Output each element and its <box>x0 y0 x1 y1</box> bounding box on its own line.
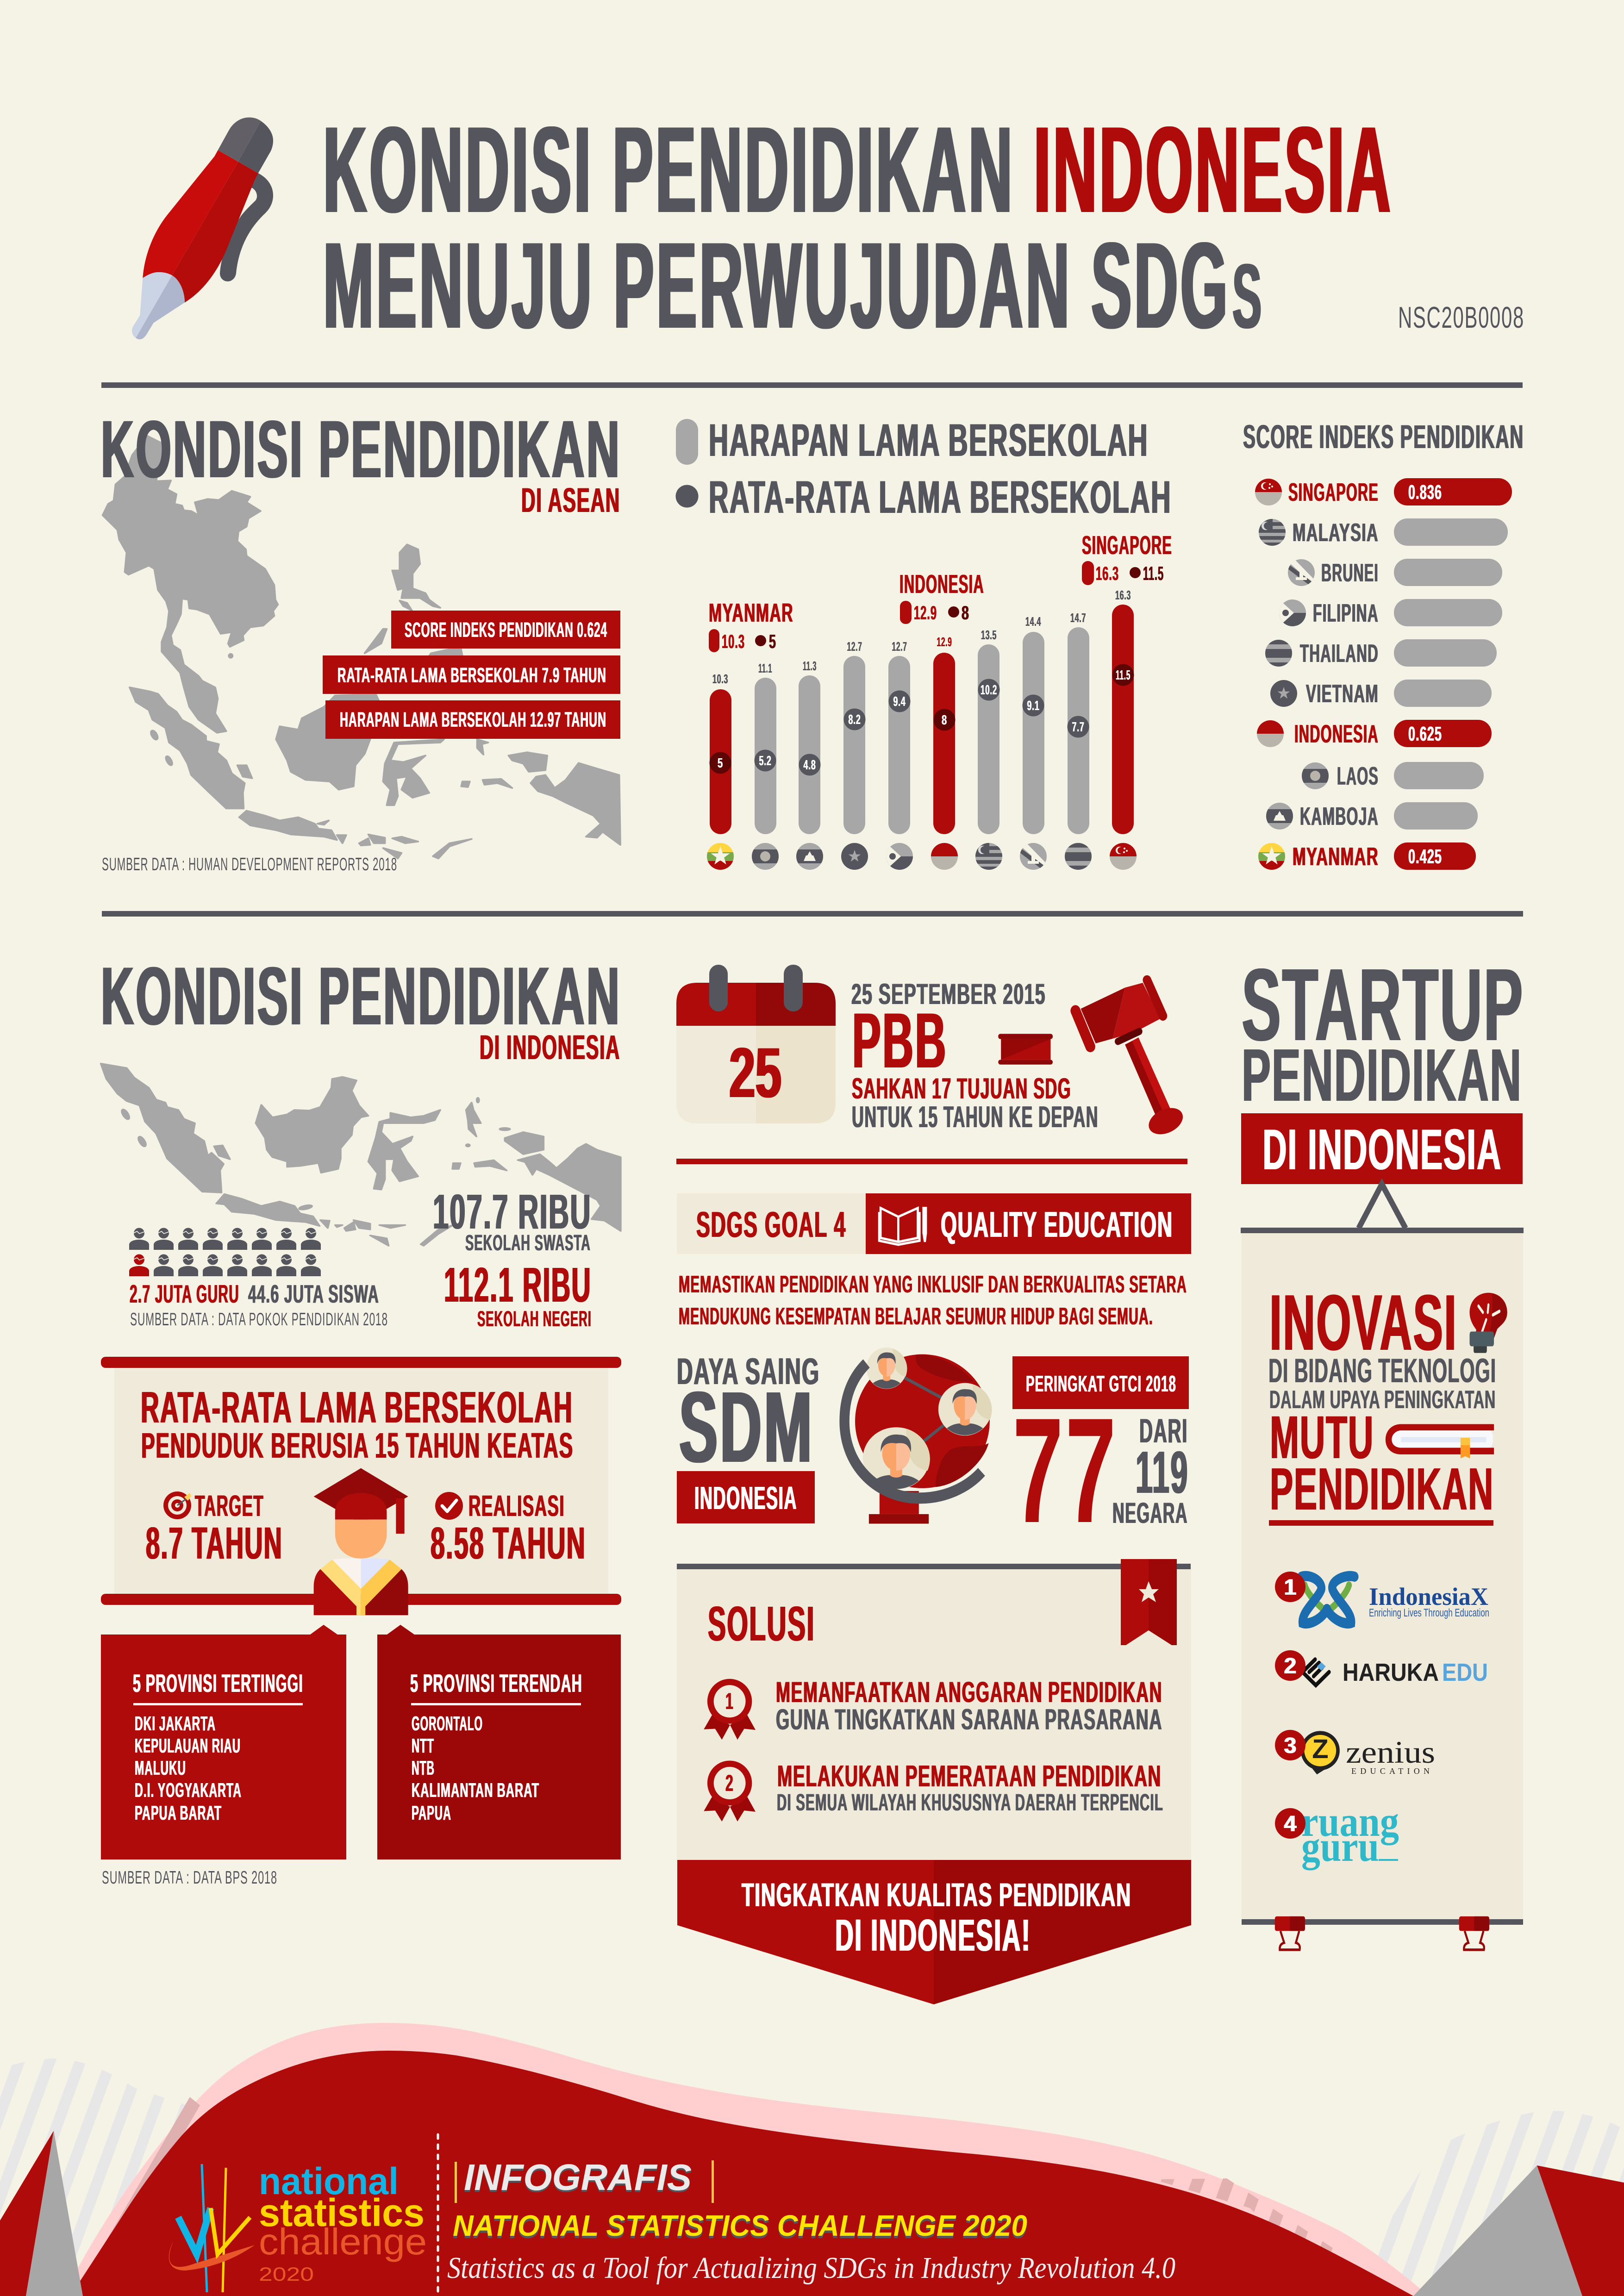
logo: HarukaEdu: HARUKA <box>1343 1659 1439 1686</box>
icon: badge 1 <box>704 1679 756 1740</box>
source note: SUMBER DATA : HUMAN DEVELOPMENT REPORTS 2018 <box>102 855 397 874</box>
dot values: 8 <box>942 713 947 728</box>
callout: Singapore: 11.5 <box>1143 562 1164 584</box>
bar top values: 16.3 <box>1115 588 1131 602</box>
heading: SOLUSI <box>708 1597 815 1651</box>
rank context: NEGARA <box>1112 1497 1188 1529</box>
source note: SUMBER DATA : DATA POKOK PENDIDIKAN 2018 <box>130 1310 388 1329</box>
panel: SDGs goal 4: SDGS GOAL 4 <box>696 1204 846 1245</box>
stat: sekolah swasta: SEKOLAH SWASTA <box>465 1231 591 1255</box>
stat: sekolah negeri <box>444 1258 592 1331</box>
number badge 3: 3 <box>1284 1734 1296 1758</box>
panel: daya saing SDM: DAYA SAING <box>677 1351 820 1392</box>
text: solusi 2: MELAKUKAN PEMERATAAN PENDIDIKAN <box>777 1759 1162 1793</box>
roll-up stand <box>1241 1184 1524 1925</box>
panel: 5 provinsi tertinggi: KEPULAUAN RIAU <box>135 1734 241 1757</box>
rank context <box>1112 1412 1189 1529</box>
text: tagline: Statistics as a Tool for Actualizing SDGs in Industry Revolution 4.0 <box>447 2251 1175 2285</box>
panel: 5 provinsi tertinggi: D.I. YOGYAKARTA <box>135 1779 242 1802</box>
country labels: MYANMAR <box>1293 842 1379 871</box>
label: target: TARGET <box>195 1489 264 1522</box>
number badge 1 <box>1275 1572 1305 1602</box>
icon: book <box>1386 1424 1494 1459</box>
country labels: SINGAPORE <box>1288 478 1379 506</box>
panel: 5 provinsi tertinggi <box>101 1625 346 1859</box>
logo: Ruangguru: ruang <box>1301 1798 1399 1845</box>
country labels: VIETNAM <box>1306 679 1379 708</box>
icon: light bulb <box>1469 1293 1507 1353</box>
panel: startup pendidikan <box>1241 948 1524 1950</box>
icon: binder clip left <box>1275 1916 1305 1950</box>
panel: 5 provinsi terendah: PAPUA <box>412 1802 451 1824</box>
callout: Myanmar: 5 <box>769 630 776 652</box>
label: QUALITY EDUCATION <box>941 1204 1173 1245</box>
bar top values: 14.4 <box>1025 614 1041 629</box>
dot values: 5 <box>718 756 723 771</box>
text block: PBB: UNTUK 15 TAHUN KE DEPAN <box>852 1100 1099 1134</box>
country labels: INDONESIA <box>1294 719 1379 748</box>
dot values <box>718 668 1131 773</box>
callout: Indonesia: 12.9 <box>914 602 937 624</box>
stat: sekolah swasta: 107.7 RIBU <box>433 1185 592 1239</box>
stat: sekolah swasta <box>433 1185 592 1255</box>
bar top values: 13.5 <box>981 628 997 642</box>
value dots <box>709 664 1134 776</box>
callout: Singapore: 16.3 <box>1096 562 1119 584</box>
callout: rata-rata lama bersekolah: RATA-RATA LAMA BERSEKOLAH 7.9 TAHUN <box>337 663 606 687</box>
icon: binder clip right <box>1459 1916 1489 1950</box>
callout: Singapore: SINGAPORE <box>1082 530 1172 560</box>
callout: score indeks <box>391 611 620 649</box>
map: ASEAN <box>103 436 620 859</box>
panel: 5 provinsi terendah: NTB <box>412 1757 435 1779</box>
bar top values: 12.9 <box>937 635 952 649</box>
score values: 0.625 <box>1408 723 1442 745</box>
bar top values: 12.7 <box>847 639 862 654</box>
text: solusi 2 <box>777 1759 1163 1816</box>
country labels: THAILAND <box>1300 639 1379 668</box>
stat: sekolah negeri: 112.1 RIBU <box>444 1258 592 1312</box>
value: target: 8.7 TAHUN <box>146 1518 283 1568</box>
number badge 3 <box>1275 1730 1305 1760</box>
bar top values: 14.7 <box>1070 611 1086 625</box>
subheading: PENDUDUK BERUSIA 15 TAHUN KEATAS <box>141 1426 574 1466</box>
logo: IndonesiaX: Enriching Lives Through Education <box>1369 1607 1489 1619</box>
text: solusi 1: GUNA TINGKATKAN SARANA PRASARANA <box>776 1703 1162 1736</box>
callout: Indonesia <box>899 569 984 624</box>
logo: Zenius: EDUCATION <box>1351 1766 1430 1776</box>
panel: score indeks pendidikan <box>1243 419 1524 871</box>
logo: national statistics challenge 2020 <box>169 2160 427 2292</box>
bar top values <box>712 588 1131 686</box>
icon: badge 2 <box>704 1760 756 1822</box>
banner: call to action: TINGKATKAN KUALITAS PENDIDIKAN <box>742 1877 1131 1914</box>
country labels: BRUNEI <box>1321 558 1379 587</box>
heading: RATA-RATA LAMA BERSEKOLAH <box>141 1383 573 1432</box>
score bars <box>1394 478 1512 870</box>
panel: peringkat GTCI <box>1012 1356 1189 1554</box>
icon: target <box>163 1491 191 1519</box>
logo: HarukaEdu <box>1303 1659 1488 1686</box>
dot values: 9.4 <box>893 694 906 709</box>
subheading: DI ASEAN <box>521 481 620 519</box>
dot values: 4.8 <box>804 758 816 773</box>
logo: Zenius: Z <box>1312 1734 1329 1764</box>
text block: goal description: MEMASTIKAN PENDIDIKAN YANG INKLUSIF DAN BERKUALITAS SETARA <box>679 1271 1187 1298</box>
logo: Ruangguru <box>1301 1798 1399 1870</box>
logo: Zenius: zenius <box>1346 1734 1435 1770</box>
dot values: 9.1 <box>1027 699 1040 713</box>
flags under bars <box>707 843 1137 870</box>
icon: check <box>435 1492 463 1520</box>
panel: 5 provinsi tertinggi: DKI JAKARTA <box>135 1712 216 1735</box>
text block: goal description <box>679 1271 1187 1330</box>
icon: badge 2: 2 <box>725 1770 734 1796</box>
banner: call to action: DI INDONESIA! <box>835 1910 1031 1960</box>
icon: calendar <box>676 965 836 1123</box>
dot values: 5.2 <box>759 754 771 768</box>
logo: Ruangguru: guru <box>1301 1823 1379 1870</box>
logo: IndonesiaX: IndonesiaX <box>1369 1583 1488 1610</box>
source note: SUMBER DATA : DATA BPS 2018 <box>102 1868 277 1888</box>
icon: pen <box>132 118 273 339</box>
legend <box>676 414 1172 523</box>
icon: book <box>879 1208 926 1245</box>
logo: IndonesiaX <box>1301 1576 1489 1623</box>
icon: badge 1: 1 <box>725 1688 734 1714</box>
icon: bookmark <box>1121 1559 1177 1645</box>
logo: national statistics challenge 2020: statistics <box>259 2191 425 2234</box>
bar top values: 11.3 <box>803 659 817 673</box>
callout: harapan lama bersekolah <box>325 700 620 739</box>
score values: 0.836 <box>1408 481 1442 504</box>
bar top values: 10.3 <box>712 672 728 686</box>
panel: 5 provinsi tertinggi: MALUKU <box>135 1757 186 1779</box>
banner: di indonesia <box>1241 1113 1523 1184</box>
text: solusi 1: MEMANFAATKAN ANGGARAN PENDIDIKAN <box>776 1676 1162 1709</box>
logo: HarukaEdu: EDU <box>1442 1659 1488 1686</box>
bar top values: 11.1 <box>758 661 772 675</box>
rank context: 119 <box>1136 1439 1189 1506</box>
icon: gavel <box>998 980 1186 1139</box>
dot values: 7.7 <box>1072 720 1084 735</box>
number badge 4: 4 <box>1284 1812 1297 1836</box>
label: realisasi: REALISASI <box>468 1489 565 1522</box>
text block: inovasi: INOVASI <box>1269 1279 1457 1367</box>
panel: 5 provinsi terendah: KALIMANTAN BARAT <box>412 1779 539 1802</box>
text: national statistics challenge 2020: NATIONAL STATISTICS CHALLENGE 2020 <box>453 2209 1027 2242</box>
text block: PBB: 25 SEPTEMBER 2015 <box>851 978 1046 1011</box>
dot values: 11.5 <box>1116 668 1131 683</box>
icon: globe with people <box>844 1348 992 1524</box>
panel: daya saing SDM: SDM <box>679 1371 814 1484</box>
logo: national statistics challenge 2020: national <box>259 2160 399 2202</box>
footer <box>0 2023 1624 2296</box>
country labels: KAMBOJA <box>1300 802 1379 830</box>
callout: Indonesia: INDONESIA <box>899 569 984 599</box>
heading: KONDISI PENDIDIKAN <box>101 950 621 1042</box>
callout: Singapore <box>1082 530 1172 585</box>
icon: graduate <box>314 1468 408 1615</box>
score values <box>1408 481 1442 868</box>
stat: siswa: 44.6 JUTA SISWA <box>248 1279 379 1308</box>
legend: HARAPAN LAMA BERSEKOLAH <box>709 414 1149 466</box>
logo: national statistics challenge 2020: challenge <box>259 2221 427 2262</box>
callout: rata-rata lama bersekolah <box>323 655 620 694</box>
rank number: 77 <box>1012 1387 1118 1554</box>
text block: PBB: PBB <box>852 997 948 1084</box>
dot values: 8.2 <box>848 712 861 727</box>
bar top values: 12.7 <box>892 639 907 654</box>
text block: PBB: SAHKAN 17 TUJUAN SDG <box>852 1073 1071 1105</box>
text block: PBB <box>851 978 1099 1134</box>
rank context: DARI <box>1139 1412 1188 1450</box>
callout: Myanmar: 10.3 <box>722 630 745 652</box>
heading <box>1242 948 1524 1117</box>
map: Indonesia <box>101 1064 621 1246</box>
callout: Myanmar: MYANMAR <box>709 598 793 628</box>
panel: 5 provinsi terendah <box>377 1625 621 1859</box>
country labels: LAOS <box>1337 761 1379 790</box>
title <box>323 101 1393 354</box>
panel: rata-rata lama bersekolah <box>101 1357 621 1615</box>
number badge 2 <box>1275 1650 1305 1681</box>
banner: call to action <box>677 1860 1191 2004</box>
callout: harapan lama bersekolah: HARAPAN LAMA BERSEKOLAH 12.97 TAHUN <box>340 708 606 731</box>
icons: guru dan siswa <box>129 1228 321 1276</box>
panel: kondisi pendidikan di ASEAN <box>101 404 621 874</box>
bar chart: lama bersekolah ASEAN <box>707 530 1172 870</box>
icon: calendar: 25 <box>729 1033 781 1112</box>
text block: goal description: MENDUKUNG KESEMPATAN BELAJAR SEUMUR HIDUP BAGI SEMUA. <box>679 1303 1153 1330</box>
subheading: DI INDONESIA <box>480 1028 620 1067</box>
value: realisasi: 8.58 TAHUN <box>431 1518 586 1568</box>
panel: 5 provinsi terendah: 5 PROVINSI TERENDAH <box>410 1669 582 1697</box>
text: solusi 1 <box>776 1676 1162 1736</box>
text: solusi 2: DI SEMUA WILAYAH KHUSUSNYA DAERAH TERPENCIL <box>777 1789 1163 1816</box>
panel: 5 provinsi tertinggi: PAPUA BARAT <box>135 1802 222 1824</box>
panel: 5 provinsi terendah: GORONTALO <box>412 1712 483 1735</box>
panel: daya saing SDM: INDONESIA <box>694 1480 797 1516</box>
panel: SDGs goal 4 <box>677 1193 1191 1254</box>
number badge 2: 2 <box>1284 1654 1296 1678</box>
dot values: 10.2 <box>981 683 997 698</box>
text: infografis: INFOGRAFIS <box>464 2157 692 2198</box>
title: S <box>1232 245 1263 347</box>
country labels: MALAYSIA <box>1293 518 1379 547</box>
text block: inovasi <box>1268 1279 1496 1526</box>
panel: peringkat GTCI: PERINGKAT GTCI 2018 <box>1026 1372 1176 1397</box>
logo: Zenius <box>1301 1731 1435 1776</box>
callout: Indonesia: 8 <box>962 602 969 624</box>
score values: 0.425 <box>1408 845 1442 868</box>
text block: inovasi: MUTU <box>1270 1403 1374 1471</box>
country labels: FILIPINA <box>1313 599 1379 627</box>
panel: 5 provinsi tertinggi: 5 PROVINSI TERTINGGI <box>133 1669 303 1697</box>
legend: RATA-RATA LAMA BERSEKOLAH <box>709 471 1172 523</box>
heading: KONDISI PENDIDIKAN <box>101 404 621 495</box>
country flags <box>1255 479 1329 870</box>
document code: NSC20B0008 <box>1398 300 1524 334</box>
number badge 4 <box>1275 1808 1305 1839</box>
country labels <box>1288 478 1379 871</box>
panel: 5 provinsi terendah: NTT <box>412 1734 434 1757</box>
number badge 1: 1 <box>1284 1575 1296 1600</box>
panel: solusi <box>677 1559 1191 2004</box>
stat: guru: 2.7 JUTA GURU <box>130 1279 239 1308</box>
panel: kondisi pendidikan di Indonesia <box>101 950 621 1331</box>
logo: national statistics challenge 2020: 2020 <box>259 2263 314 2285</box>
callout: score indeks: SCORE INDEKS PENDIDIKAN 0.624 <box>405 618 607 642</box>
callout: Myanmar <box>709 598 793 652</box>
panel: daya saing SDM <box>677 1351 820 1523</box>
stat: sekolah negeri: SEKOLAH NEGERI <box>477 1306 592 1331</box>
